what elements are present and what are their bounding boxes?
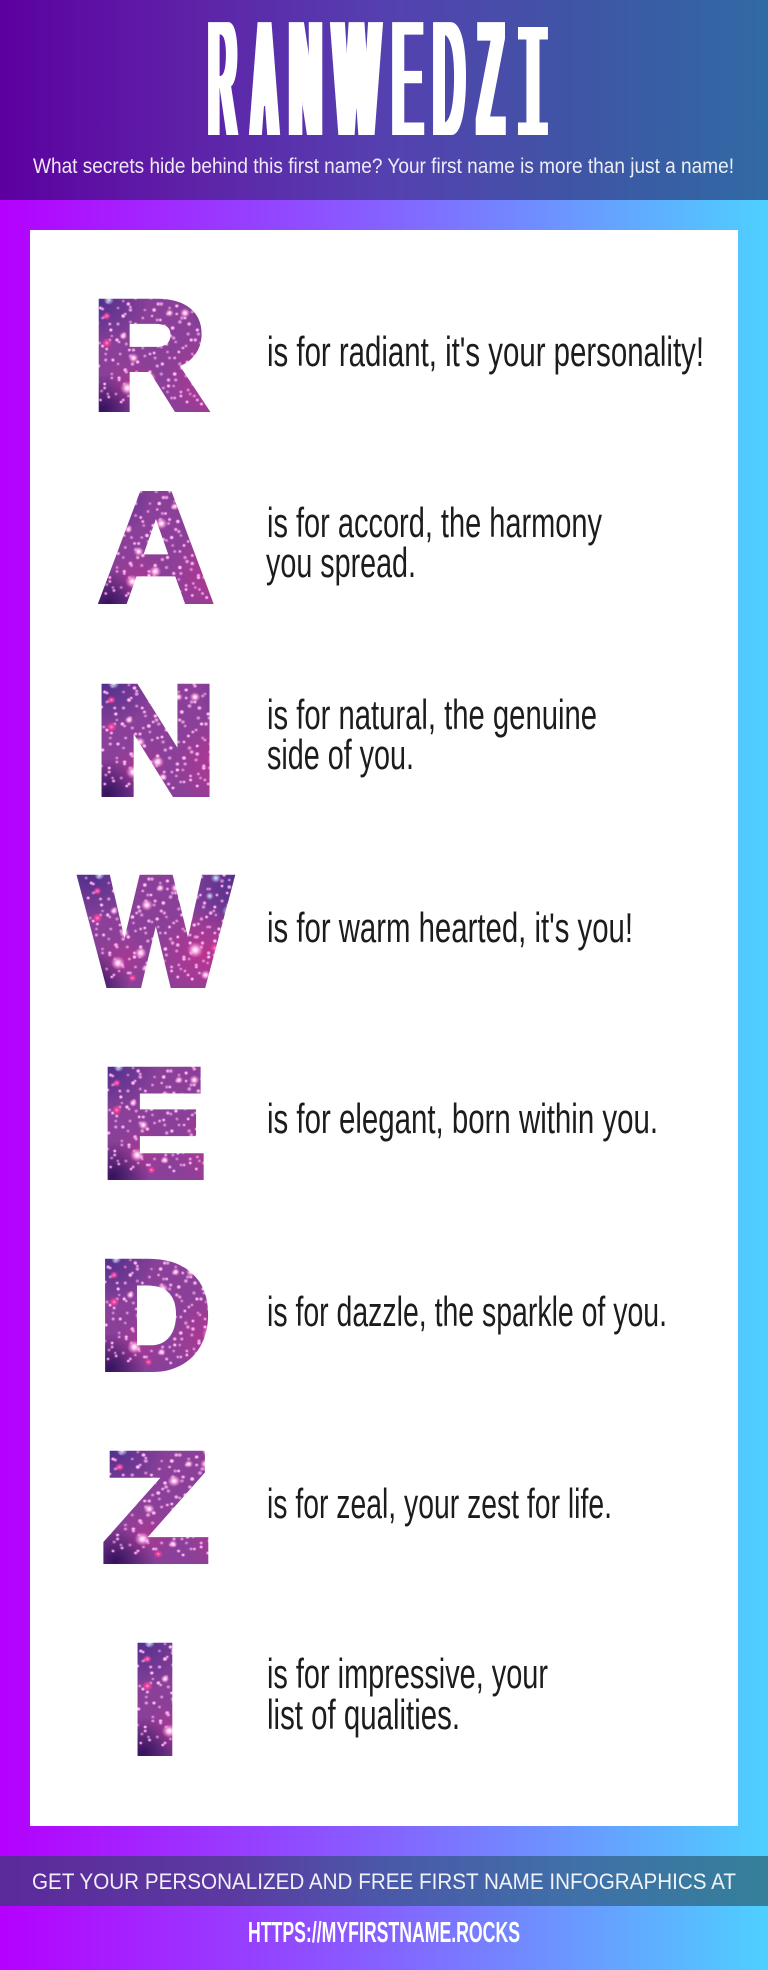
letter I: I <box>132 1616 178 1783</box>
letter A: A <box>98 460 214 635</box>
text for I: list of qualities. <box>267 1691 460 1738</box>
row E <box>102 1040 658 1208</box>
row I <box>132 1616 548 1783</box>
footer band <box>0 1856 768 1906</box>
row D <box>100 1232 667 1399</box>
text for N <box>267 691 597 778</box>
title: RANWEDZI: I <box>517 0 549 185</box>
text for N: side of you. <box>267 731 414 778</box>
text for A: is for accord, the harmony <box>267 499 602 546</box>
text for A <box>266 499 602 586</box>
row N <box>96 657 597 824</box>
footer url: HTTPS://MYFIRSTNAME.ROCKS <box>248 1917 520 1949</box>
title: RANWEDZI <box>209 0 549 185</box>
row W <box>83 848 633 1016</box>
letter N: N <box>96 657 215 824</box>
letter R: R <box>92 269 206 441</box>
row A <box>98 460 602 635</box>
letter E: E <box>102 1040 205 1208</box>
letter Z: Z <box>104 1423 208 1591</box>
text for N: is for natural, the genuine <box>267 691 597 738</box>
row Z <box>104 1423 612 1591</box>
letter W: W <box>83 848 229 1016</box>
text for I <box>267 1650 548 1738</box>
text for I: is for impressive, your <box>267 1650 548 1697</box>
text for A: you spread. <box>266 539 416 586</box>
letter D: D <box>100 1232 209 1399</box>
text for Z: is for zeal, your zest for life. <box>267 1480 612 1527</box>
panel: white letter list <box>30 230 738 1826</box>
header band <box>0 0 768 200</box>
row R <box>92 269 704 441</box>
